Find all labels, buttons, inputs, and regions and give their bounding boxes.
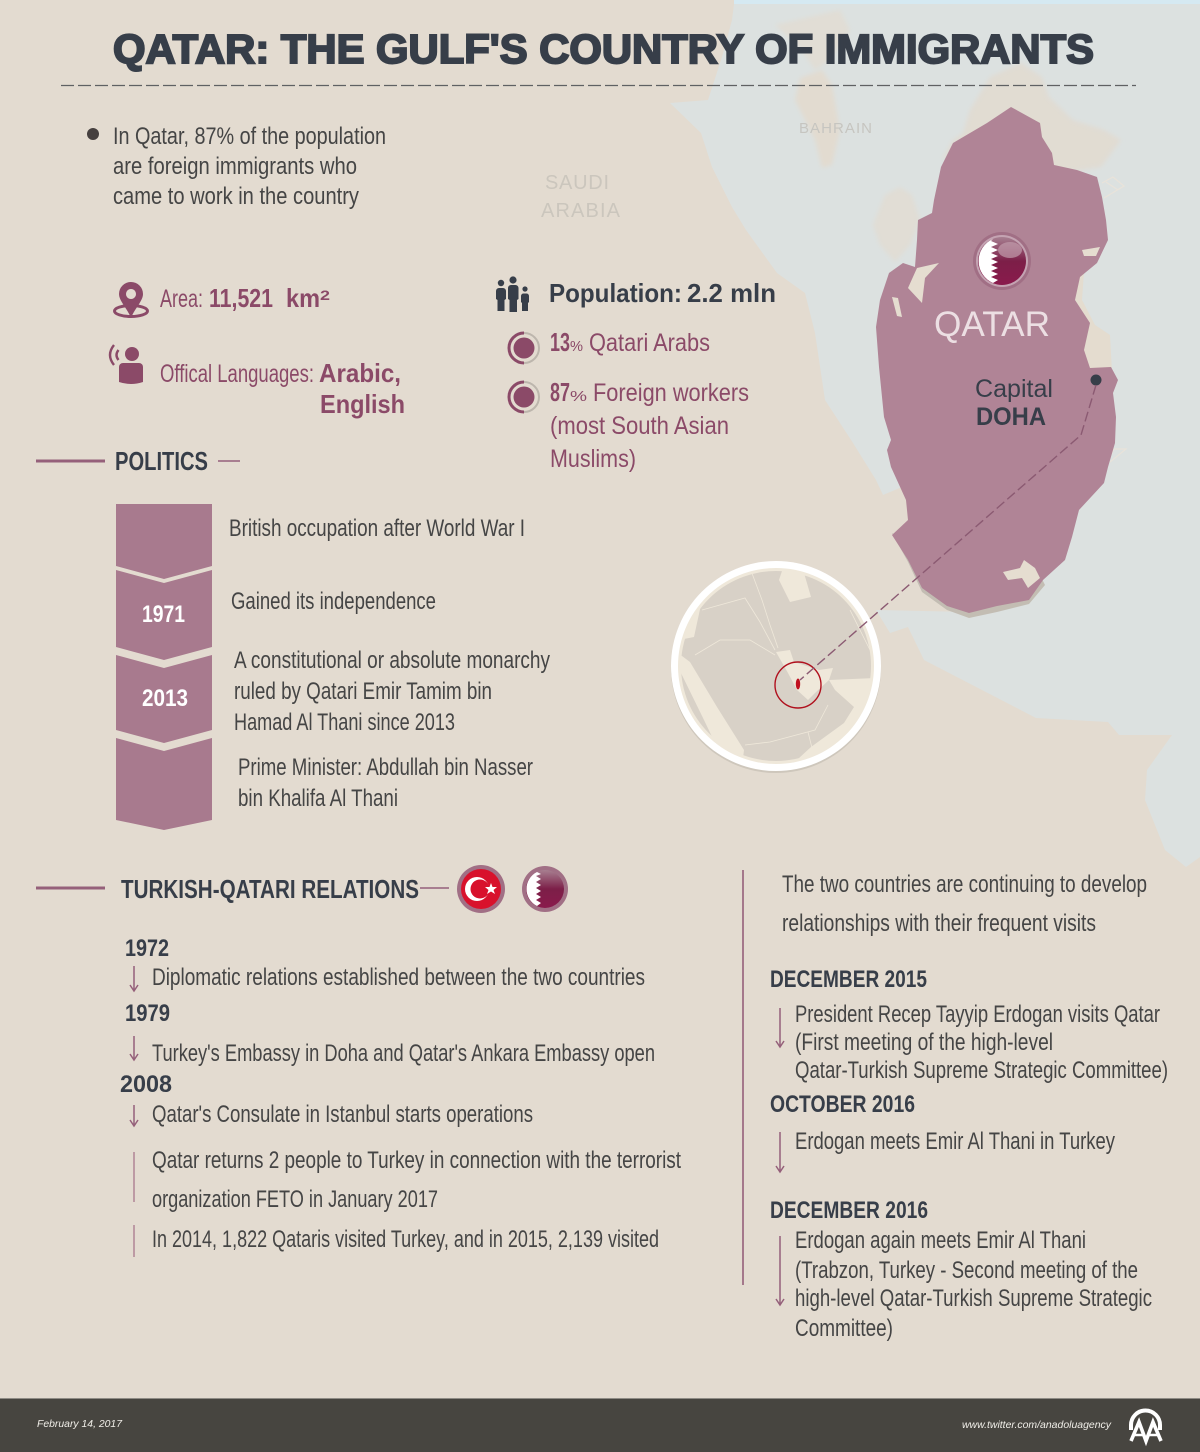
locator ring [775,662,821,708]
visit: December 2016 [770,1197,1152,1342]
politics timeline text: British occupation after World War I [229,515,525,542]
visit: October 2016: Erdogan meets Emir Al Thani in Turkey [795,1128,1115,1155]
column divider and intro [743,870,1147,1285]
timeline: 1972: Diplomatic relations established between the two countries [152,964,645,991]
population: 2.2 mln [687,278,776,308]
intro text: are foreign immigrants who [113,153,357,180]
column divider and intro: relationships with their frequent visits [782,910,1096,937]
politics timeline text: Prime Minister: Abdullah bin Nasser [238,754,533,781]
timeline: 1979: Turkey's Embassy in Doha and Qatar's Ankara Embassy open [152,1040,655,1067]
map labels: Saudi Arabia: ARABIA [541,200,621,222]
heading: politics: POLITICS [115,446,208,476]
visit: December 2016: DECEMBER 2016 [770,1197,928,1224]
languages [110,345,405,419]
visit: October 2016 [770,1091,1115,1172]
footer [0,1398,1200,1452]
map label: Bahrain: BAHRAIN [799,120,872,137]
timeline: 1972 [125,935,645,991]
heading: Turkish-Qatari relations: TURKISH-QATARI RELATIONS [121,874,419,904]
intro text [87,123,386,210]
area: km [286,283,320,313]
timeline: 2008 [120,1071,533,1128]
stat: 13% Qatari Arabs: 13 [550,327,570,357]
politics timeline text: Hamad Al Thani since 2013 [234,709,455,736]
visit: October 2016: OCTOBER 2016 [770,1091,915,1118]
footer: www.twitter.com/anadoluagency [962,1419,1112,1431]
icon: Turkish flag [457,865,505,913]
map: Qatar [876,107,1118,618]
capital label: Capital [975,375,1053,403]
politics timeline text: Gained its independence [231,588,436,615]
stat: 87% foreign workers: Muslims) [550,445,636,473]
languages: Arabic, [319,358,401,388]
note: FETO returns: Qatar returns 2 people to Turkey in connection with the terrorist [152,1147,681,1174]
map labels: Saudi Arabia [541,172,621,222]
intro text: came to work in the country [113,183,359,210]
politics timeline text [229,515,550,812]
icon: Qatar flag on map [973,232,1031,290]
area [114,282,330,318]
languages: English [320,389,405,419]
timeline: 2008: 2008 [120,1071,172,1098]
stat: 13% Qatari Arabs: Qatari Arabs [589,329,710,357]
timeline: 1979 [125,1000,655,1067]
area: 11,521 [209,283,273,313]
stat: 87% foreign workers: Foreign workers [593,379,749,407]
capital label: DOHA [976,403,1046,431]
intro text: In Qatar, 87% of the population [113,123,386,150]
visit: December 2016: Committee) [795,1315,893,1342]
area: Area: [160,285,203,313]
stat: 87% foreign workers: % [570,388,587,405]
note: visitors: In 2014, 1,822 Qataris visited Turkey, and in 2015, 2,139 visited [152,1226,659,1253]
population [496,276,776,312]
visit: December 2016: Erdogan again meets Emir Al Thani [795,1227,1086,1254]
timeline: 2008: Qatar's Consulate in Istanbul starts operations [152,1101,533,1128]
stat: 13% Qatari Arabs: % [570,338,583,355]
stat: 13% Qatari Arabs [509,327,710,363]
stat: 87% foreign workers: (most South Asian [550,412,729,440]
map labels: Saudi Arabia: SAUDI [545,172,609,194]
politics timeline text: ruled by Qatari Emir Tamim bin [234,678,492,705]
languages: Offical Languages: [160,360,314,388]
note: FETO returns: organization FETO in January 2017 [152,1186,438,1213]
visit: December 2015: DECEMBER 2015 [770,966,927,993]
politics timeline text: A constitutional or absolute monarchy [234,647,550,674]
stat: 87% foreign workers: 87 [550,377,570,407]
title: QATAR: THE GULF'S COUNTRY OF IMMIGRANTS [113,26,1094,72]
note: FETO returns [134,1147,681,1213]
population: Population: [549,278,682,308]
politics timeline text: bin Khalifa Al Thani [238,785,398,812]
visit: December 2015 [770,966,1168,1084]
label: QATAR: QATAR [934,305,1050,344]
timeline: 1979: 1979 [125,1000,170,1027]
politics timeline chevrons [116,504,212,830]
stat: 87% foreign workers [509,377,749,473]
inset locator map [671,561,881,773]
area: 2 [320,287,330,303]
capital label [975,374,1102,431]
icon: Qatari flag [522,866,568,912]
footer: February 14, 2017 [37,1418,123,1430]
politics timeline chevrons: 1971 [142,601,185,628]
politics timeline chevrons: 2013 [142,685,188,712]
icon: AA logo [1131,1410,1161,1441]
connector: Doha to inset [800,385,1096,680]
visit: December 2015: (First meeting of the high-level [795,1029,1053,1056]
timeline: 1972: 1972 [125,935,169,962]
